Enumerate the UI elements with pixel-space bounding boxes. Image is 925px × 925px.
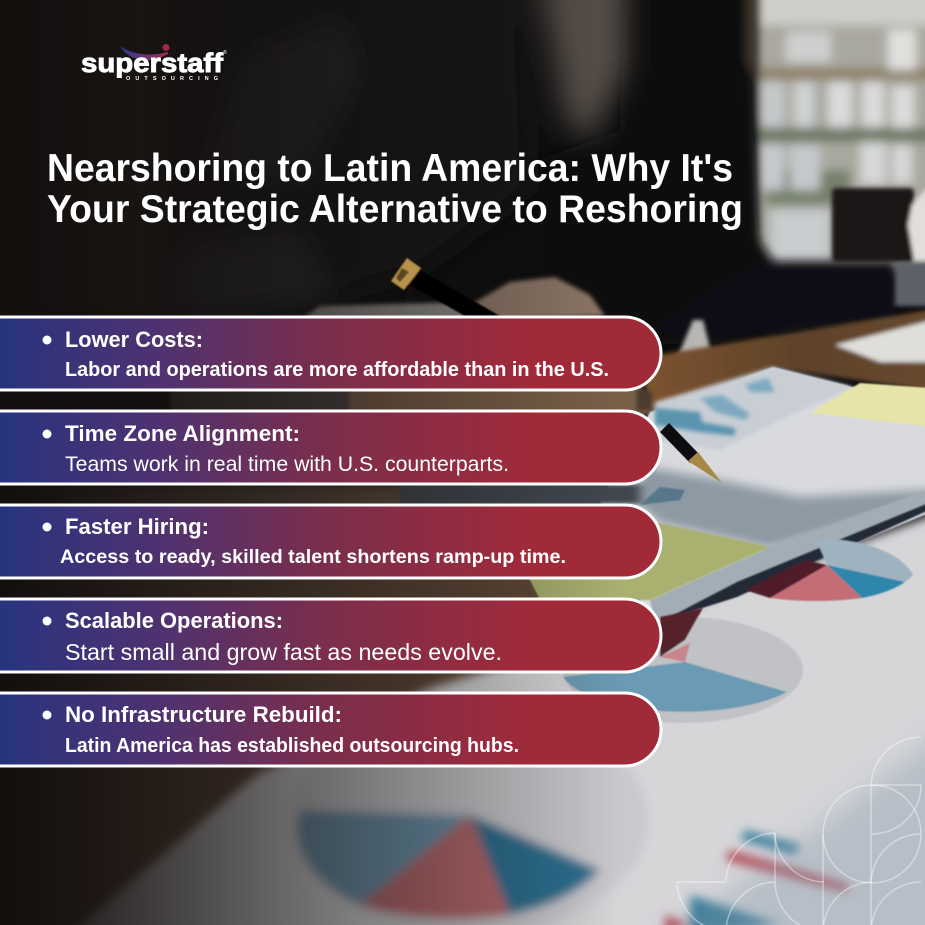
logo subline: OUTSOURCING xyxy=(126,76,218,82)
logo registered mark: ® xyxy=(223,49,227,56)
panel: lower costs: Labor and operations are more affordable than in the U.S. xyxy=(65,359,609,381)
jacket xyxy=(400,0,895,345)
cool strip xyxy=(650,478,925,622)
panel: time zone alignment: Teams work in real time with U.S. counterparts. xyxy=(65,453,509,476)
wood desk under the panels xyxy=(0,560,760,925)
window backdrop xyxy=(756,0,925,270)
blurred bar chart xyxy=(665,830,850,925)
panel: no infrastructure rebuild xyxy=(0,693,661,766)
cool tint lower right xyxy=(640,720,925,925)
wooden desk xyxy=(640,305,925,412)
logo swoosh xyxy=(120,46,168,60)
yellow sticky xyxy=(520,523,770,600)
title xyxy=(47,147,743,231)
upper pie xyxy=(745,538,913,601)
panel: scalable operations: Scalable Operations: xyxy=(65,608,283,633)
sleeve and hand holding pen xyxy=(170,277,655,415)
chair and sleeve xyxy=(678,150,925,356)
panel: faster hiring xyxy=(0,505,661,578)
panel: lower costs xyxy=(0,317,661,390)
logo xyxy=(81,44,227,82)
pen xyxy=(391,258,722,483)
title: Your Strategic Alternative to Reshoring xyxy=(47,188,743,231)
large bottom pie and paper xyxy=(292,705,648,925)
decorative geometric line art xyxy=(677,737,921,925)
top paper with charts xyxy=(600,367,925,640)
left dark gradient overlay xyxy=(0,0,620,925)
logo dot xyxy=(162,44,170,51)
panel: faster hiring: Faster Hiring: xyxy=(65,514,209,539)
panel: time zone alignment: Time Zone Alignment: xyxy=(65,421,300,446)
panel: faster hiring: Access to ready, skilled talent shortens ramp-up time. xyxy=(60,546,566,568)
shirt and left sleeve xyxy=(0,0,625,320)
middle pie xyxy=(563,608,803,723)
panel: time zone alignment xyxy=(0,411,661,484)
logo wordmark: superstaff xyxy=(81,48,224,78)
panel: no infrastructure rebuild: Latin America has established outsourcing hubs. xyxy=(65,735,519,757)
panel: no infrastructure rebuild: No Infrastructure Rebuild: xyxy=(65,702,342,727)
dark band xyxy=(660,490,925,622)
panel: scalable operations: Start small and grow fast as needs evolve. xyxy=(65,639,502,665)
panel: scalable operations xyxy=(0,599,661,672)
panel: lower costs: Lower Costs: xyxy=(65,327,203,352)
title: Nearshoring to Latin America: Why It's xyxy=(47,147,733,190)
lower papers xyxy=(40,505,925,925)
